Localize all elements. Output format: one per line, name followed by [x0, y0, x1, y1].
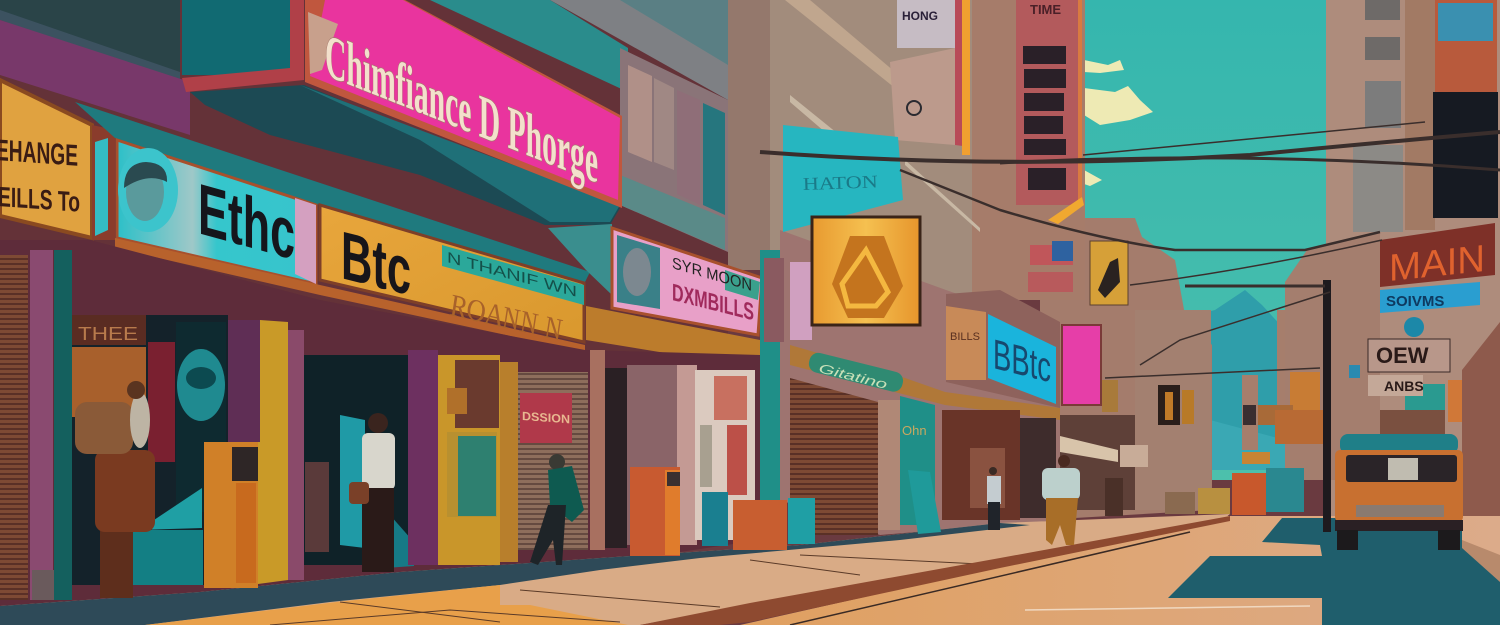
person: walking on sidewalk — [1042, 455, 1080, 545]
far building windows — [1353, 0, 1403, 232]
right buildings signs: ANBS — [1384, 378, 1424, 394]
teal bin 2 — [788, 498, 815, 544]
pink sign: Chimfiance D Phorge — [325, 20, 598, 197]
sandwich board — [908, 470, 941, 534]
street — [740, 516, 1500, 625]
orange trash bin — [630, 467, 680, 556]
top left fascia — [0, 0, 180, 72]
upper right glass band — [420, 0, 728, 100]
Btc sign: ROANN N — [449, 287, 564, 349]
vertical sign: TIME — [1030, 2, 1061, 17]
vertical sign — [1016, 0, 1082, 205]
far lower block — [780, 230, 1060, 535]
shutter with poster: DSSION — [522, 409, 570, 426]
person: distant walker — [1105, 478, 1123, 516]
pink neon sign — [1062, 325, 1101, 405]
small sign with portrait: SYR MOON — [672, 254, 752, 295]
Ethc sign — [117, 140, 316, 284]
awning — [75, 102, 590, 282]
Btc sign: Btc — [341, 216, 411, 310]
floating teal sign — [783, 125, 903, 232]
street pole — [1323, 280, 1331, 532]
amber glowing sign — [812, 217, 920, 325]
person with backpack — [75, 381, 155, 598]
overhead wires — [760, 122, 1500, 378]
right buildings signs: MAIN — [1389, 238, 1485, 290]
teal poster — [900, 396, 935, 525]
flag — [1028, 241, 1073, 292]
distant tower — [1242, 310, 1290, 450]
left shop window — [72, 315, 228, 585]
pole — [760, 250, 812, 502]
teal bin — [702, 492, 728, 546]
teal poster: Ohn — [902, 423, 927, 438]
clouds — [1084, 60, 1153, 186]
poster wall — [695, 370, 755, 540]
person: walking with bag — [349, 413, 395, 572]
shop shutter — [790, 378, 878, 535]
mid distance buildings — [1040, 205, 1212, 520]
sunlit pavement — [145, 585, 628, 625]
BBtc sign group — [946, 290, 1060, 408]
shutter with poster — [518, 372, 588, 550]
left amber sign: EILLS To — [0, 181, 80, 218]
right buildings signs: SOIVMS — [1386, 293, 1444, 310]
central doorway — [304, 355, 414, 568]
distant signs — [1102, 372, 1323, 464]
lower left wall — [0, 240, 760, 610]
left shop window: THEE — [78, 324, 138, 344]
canopy center — [548, 224, 612, 295]
mountains — [1195, 290, 1285, 470]
window panes — [620, 65, 725, 250]
small sign with portrait: DXMBILLS — [672, 279, 754, 326]
top right billboard — [1433, 0, 1498, 218]
purple pillar — [408, 350, 438, 565]
poster: HONG — [897, 0, 955, 48]
ledge — [785, 0, 895, 88]
sidewalk shadow — [0, 523, 1030, 625]
right shop — [1462, 322, 1500, 540]
pink sign — [305, 0, 622, 208]
tower with vertical sign — [970, 0, 1085, 300]
person: distant in shirt — [987, 467, 1001, 530]
Btc sign — [320, 205, 584, 349]
distant vehicles — [1165, 468, 1304, 515]
shutter far left — [0, 255, 28, 600]
Btc sign: N THANIF WN — [447, 249, 577, 301]
sky — [1060, 0, 1350, 480]
BBtc sign group: BBtc — [993, 331, 1051, 392]
poster: HONG: HONG — [902, 9, 938, 23]
sidewalk — [0, 514, 1230, 625]
road shadow — [1168, 518, 1500, 625]
small sign with portrait — [612, 228, 762, 335]
green oval sign — [807, 351, 905, 394]
orange kiosk — [204, 442, 258, 588]
person: walking dark teal coat — [530, 454, 584, 565]
floating teal sign: HATON — [802, 171, 878, 194]
BBtc sign group: BILLS — [950, 331, 980, 343]
orange van — [1335, 434, 1463, 550]
far right tall building — [1326, 0, 1500, 560]
curb — [640, 516, 1230, 625]
upper left wall — [0, 0, 728, 360]
barrel — [733, 500, 787, 550]
left amber sign — [0, 80, 115, 240]
right buildings signs: OEW — [1376, 343, 1429, 368]
right buildings signs — [1349, 223, 1495, 434]
Ethc sign: Ethc — [198, 168, 295, 276]
left pillars — [30, 250, 72, 600]
yellow poster — [1090, 241, 1128, 305]
green oval sign: Gitatino — [817, 360, 889, 392]
central door frame — [288, 330, 304, 580]
yellow door — [438, 355, 500, 565]
